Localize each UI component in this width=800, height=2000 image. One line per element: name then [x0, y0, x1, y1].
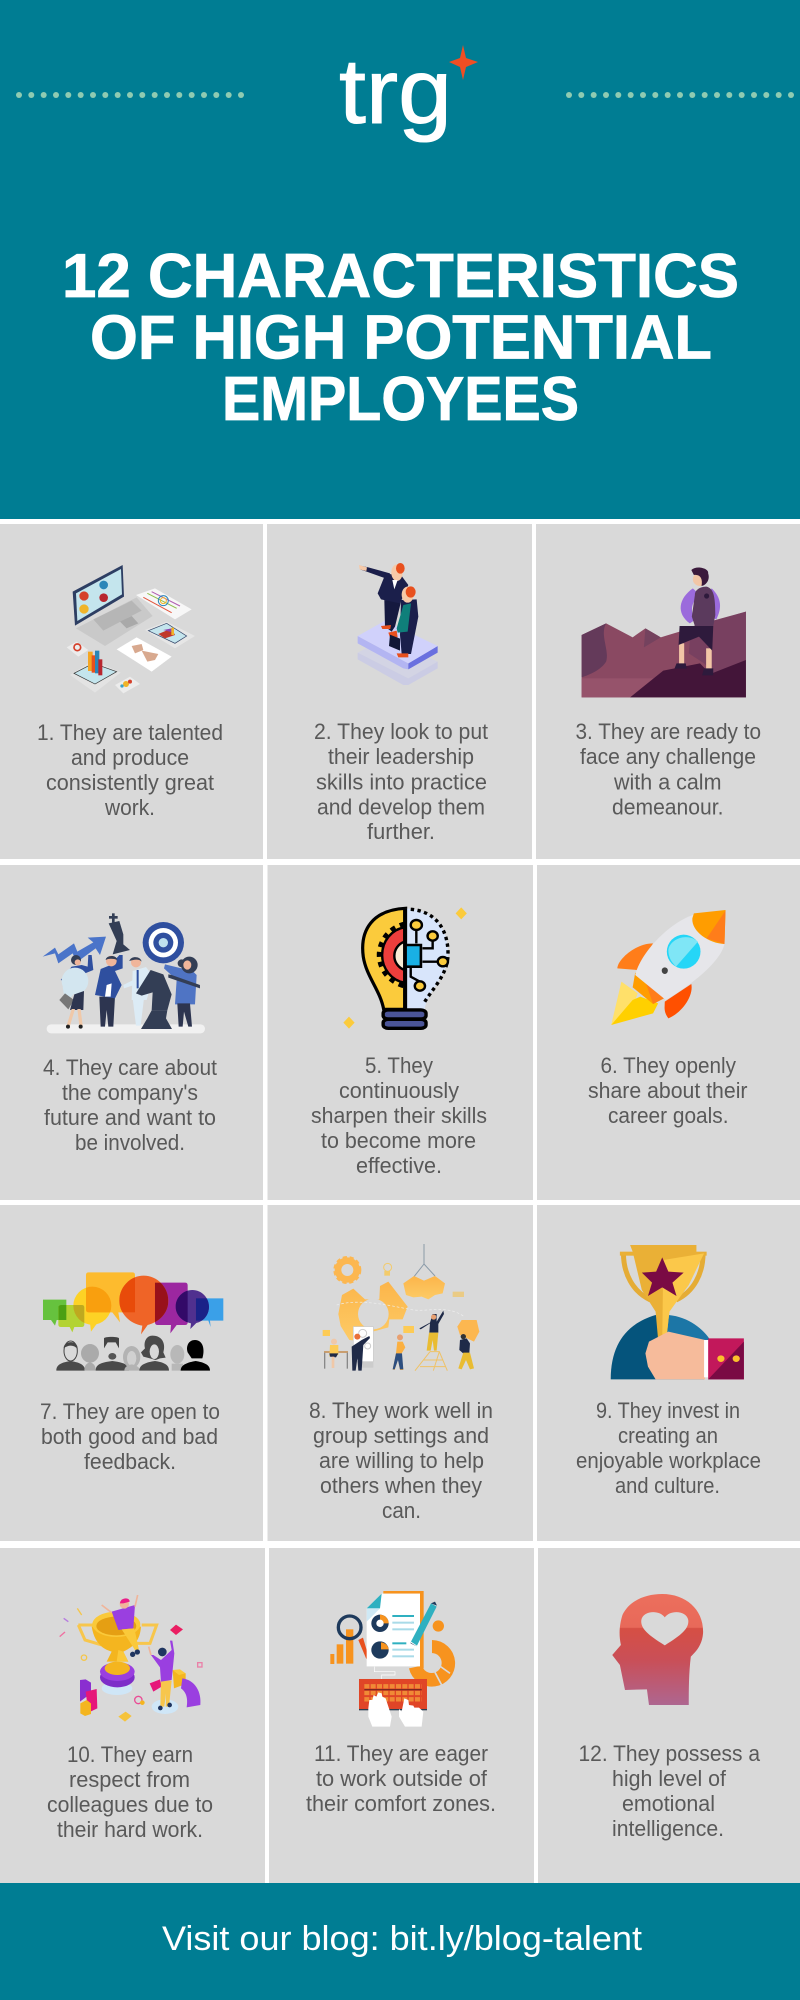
text 3: face any challenge — [580, 744, 756, 769]
text 5: sharpen their skills — [311, 1103, 487, 1128]
text 3: demeanour. — [612, 794, 724, 820]
text 1 — [37, 720, 223, 820]
icon: team with chess pieces and target — [43, 913, 205, 1033]
text 8: group settings and — [313, 1423, 489, 1448]
icon: laptop and devices — [67, 565, 195, 693]
text 10 — [47, 1742, 213, 1842]
logo: trg — [339, 41, 452, 143]
text 3: 3. They are ready to — [576, 719, 761, 744]
panel: characteristic 12 — [538, 1548, 800, 1883]
text 11: to work outside of — [316, 1766, 488, 1791]
panel: characteristic 3 — [536, 524, 800, 859]
dotted divider left — [16, 92, 244, 98]
text 12: emotional — [622, 1791, 715, 1816]
icon: half gear half circuit lightbulb — [343, 907, 467, 1029]
text 5: to become more — [321, 1128, 476, 1153]
text 9 — [576, 1398, 761, 1498]
text 9: enjoyable workplace — [576, 1448, 761, 1473]
text 7: both good and bad — [41, 1424, 218, 1449]
text 5: 5. They — [365, 1053, 434, 1078]
text 1: consistently great — [46, 770, 215, 795]
panel: characteristic 2 — [267, 524, 532, 859]
text 2 — [314, 719, 489, 844]
text 4: be involved. — [75, 1130, 185, 1155]
text 2: skills into practice — [316, 770, 487, 794]
icon: speech bubbles above people — [43, 1272, 223, 1371]
text 12 — [578, 1741, 760, 1841]
text 3 — [576, 719, 761, 820]
panel: characteristic 1 — [0, 524, 263, 859]
text 9: and culture. — [615, 1473, 720, 1498]
text 10: 10. They earn — [67, 1742, 193, 1767]
text 5: continuously — [339, 1078, 460, 1103]
text 8: can. — [382, 1498, 421, 1523]
text 7: feedback. — [84, 1449, 176, 1474]
panel: characteristic 6 — [537, 865, 800, 1200]
icon: hand holding trophy — [611, 1245, 744, 1379]
icon: team assembling gears — [323, 1244, 479, 1371]
icon: two businessmen on platform — [358, 563, 438, 685]
footer link text: Visit our blog: bit.ly/blog-talent — [162, 1920, 643, 1958]
text 11: their comfort zones. — [306, 1791, 496, 1816]
text 1: work. — [104, 795, 155, 820]
header banner — [0, 0, 800, 519]
text 5: effective. — [356, 1153, 442, 1178]
text 5 — [311, 1053, 487, 1178]
text 9: creating an — [618, 1423, 718, 1448]
icon: hiker on mountains — [582, 568, 746, 697]
text 4: the company's — [62, 1080, 198, 1105]
text 12: 12. They possess a — [578, 1741, 760, 1766]
text 9: 9. They invest in — [596, 1398, 740, 1423]
text 1: and produce — [71, 745, 189, 770]
text 11 — [306, 1741, 496, 1816]
text 2: 2. They look to put — [314, 719, 489, 744]
text 12: intelligence. — [612, 1816, 724, 1841]
text 6: share about their — [588, 1078, 748, 1103]
panel: characteristic 9 — [537, 1205, 800, 1541]
text 7 — [40, 1399, 220, 1474]
text 6 — [588, 1053, 748, 1128]
text 6: career goals. — [608, 1103, 728, 1128]
text 2: and develop them — [317, 794, 485, 820]
panel: characteristic 4 — [0, 865, 263, 1200]
text 10: colleagues due to — [47, 1792, 213, 1817]
text 2: further. — [367, 819, 435, 844]
text 8: are willing to help — [319, 1448, 484, 1473]
text 8: 8. They work well in — [309, 1398, 493, 1423]
text 11: 11. They are eager — [314, 1741, 488, 1766]
text 8 — [309, 1398, 493, 1523]
icon: report, magnifier and keyboard — [330, 1591, 455, 1727]
text 10: their hard work. — [57, 1817, 203, 1842]
text 3: with a calm — [613, 770, 722, 794]
text 4 — [43, 1055, 218, 1155]
text 1: 1. They are talented — [37, 720, 223, 745]
text 12: high level of — [612, 1766, 727, 1791]
text 2: their leadership — [328, 744, 474, 769]
text 10: respect from — [69, 1767, 190, 1792]
footer banner — [0, 1883, 800, 2000]
text 4: 4. They care about — [43, 1055, 218, 1080]
title — [62, 242, 739, 434]
text 8: others when they — [320, 1473, 483, 1498]
panel: characteristic 10 — [0, 1548, 265, 1883]
title: OF HIGH POTENTIAL — [90, 304, 712, 372]
icon: head with heart — [612, 1594, 703, 1705]
panel: characteristic 5 — [268, 865, 533, 1200]
icon: rocket — [611, 910, 726, 1025]
title: 12 CHARACTERISTICS — [62, 242, 739, 311]
text 7: 7. They are open to — [40, 1399, 220, 1424]
text 4: future and want to — [44, 1105, 216, 1130]
icon: people with trophy — [60, 1595, 202, 1722]
panel: characteristic 8 — [268, 1205, 533, 1541]
panel: characteristic 11 — [269, 1548, 534, 1883]
text 6: 6. They openly — [600, 1053, 737, 1078]
panel: characteristic 7 — [0, 1205, 263, 1541]
title: EMPLOYEES — [222, 365, 579, 434]
dotted divider right — [566, 92, 794, 98]
